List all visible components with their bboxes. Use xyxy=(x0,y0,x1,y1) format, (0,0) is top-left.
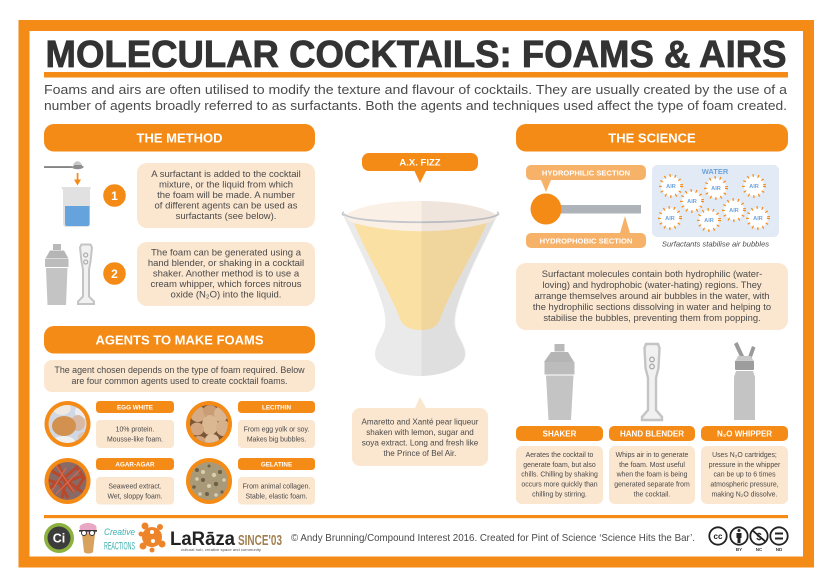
number badge 2: 2 xyxy=(111,267,118,281)
text box: agents intro xyxy=(44,360,315,392)
icon: creative commons licence: cc xyxy=(714,532,723,541)
logo: la raza: LaRāza xyxy=(170,529,235,550)
text box: egg white: 10% protein. xyxy=(116,426,154,434)
logo: creative reactions: Creative xyxy=(104,527,135,538)
panel: the method xyxy=(44,124,315,306)
text box: shaker: chilling by stirring. xyxy=(532,492,587,498)
text box: step 2: oxide (N₂O) into the liquid. xyxy=(171,290,281,300)
text box: shaker: chills. Chilling by shaking xyxy=(521,472,598,478)
text box: n2o whipper: pressure in the whipper xyxy=(709,462,781,469)
heading: the science: THE SCIENCE xyxy=(608,130,696,146)
text box: step 2: cream whipper, which forces nitrous xyxy=(150,279,302,290)
text box: cocktail description: the Prince of Bel Air. xyxy=(384,449,456,458)
intro text xyxy=(44,82,788,113)
photo: agar-agar xyxy=(44,458,91,504)
illustration: cocktail glass xyxy=(342,201,498,376)
icon: spoon, arrow and beaker xyxy=(44,161,91,227)
label: n2o whipper: N₂O WHIPPER xyxy=(717,430,772,438)
text box: hand blender: generated separate from xyxy=(614,482,690,488)
text box: agents intro: are four common agents used to create cocktail foams. xyxy=(71,376,288,386)
text box: n2o whipper: atmospheric pressure, xyxy=(710,482,779,488)
label: shaker xyxy=(516,426,603,441)
diagram: air bubbles in water: AIR xyxy=(753,216,763,222)
text box: n2o whipper xyxy=(701,446,788,504)
heading: agents xyxy=(44,326,315,354)
intro text: number of agents broadly referred to as surfactants. Both the agents and techniques used affect the type of foam created. xyxy=(44,98,787,113)
text box: n2o whipper: making N₂O dissolve. xyxy=(712,492,778,498)
text box: lecithin xyxy=(238,420,315,448)
label: egg white: EGG WHITE xyxy=(117,404,153,412)
text box: step 1: surfactants (see below). xyxy=(176,211,276,222)
label: n2o whipper xyxy=(701,426,788,441)
label: hydrophobic section: HYDROPHOBIC SECTION xyxy=(540,236,632,246)
text box: gelatine: From animal collagen. xyxy=(243,484,310,490)
text box: hand blender: Whips air in to generate xyxy=(616,452,689,459)
photo: gelatine xyxy=(186,458,232,504)
icon: shaker xyxy=(544,344,574,420)
text box: egg white: Mousse-like foam. xyxy=(107,436,163,444)
label: hand blender: HAND BLENDER xyxy=(620,430,684,438)
logo: orange splat xyxy=(138,522,166,552)
text box: hand blender xyxy=(609,446,695,504)
heading: agents: AGENTS TO MAKE FOAMS xyxy=(95,332,264,348)
diagram: air bubbles in water: AIR xyxy=(749,184,759,190)
text box: hand blender: when the foam is being xyxy=(616,472,688,478)
text box: step 1: mixture, or the liquid from which xyxy=(159,180,293,190)
logo: la raza: cultural hub, creative space and community xyxy=(181,548,262,552)
icon: creative commons licence: $ xyxy=(756,532,762,543)
text box: shaker: Aerates the cocktail to xyxy=(526,452,594,459)
number badge 1: 1 xyxy=(111,189,118,203)
text box: step 2 xyxy=(137,242,315,306)
text box: egg white xyxy=(96,420,174,448)
text box: surfactant explanation: loving) and hydrophobic (water-hating) regions. They xyxy=(542,279,762,290)
diagram: air bubbles in water xyxy=(652,165,779,237)
icon: hand blender xyxy=(642,344,662,420)
text box: step 1: of different agents can be used as xyxy=(155,200,298,212)
diagram: air bubbles in water: AIR xyxy=(687,199,697,205)
text box: cocktail description: shaken with lemon, sugar and xyxy=(366,428,474,437)
text box: surfactant explanation: stabilise the bubbles, preventing them from popping. xyxy=(543,312,761,323)
text box: agar-agar: Seaweed extract. xyxy=(108,484,162,490)
icon: n2o whipper xyxy=(734,342,756,420)
text box: agar-agar: Wet, sloppy foam. xyxy=(107,494,163,500)
title: MOLECULAR COCKTAILS: FOAMS & AIRS xyxy=(46,34,786,76)
label: gelatine: GELATINE xyxy=(261,462,292,468)
logo: compound interest: Ci xyxy=(53,532,65,546)
text: REACTIONS xyxy=(104,540,135,552)
text box: step 1: the foam will be made. A number xyxy=(157,190,295,201)
label: a.x. fizz xyxy=(362,153,478,183)
heading: the method xyxy=(44,124,315,152)
diagram: air bubbles in water: AIR xyxy=(666,184,676,190)
label: shaker: SHAKER xyxy=(543,430,577,438)
text box: step 2: shaker. Another method is to use a xyxy=(153,268,300,280)
label: agar-agar: AGAR-AGAR xyxy=(115,462,155,468)
title underline xyxy=(44,72,788,78)
logo: pint of science xyxy=(79,523,97,554)
text box: shaker: generate foam, but also xyxy=(523,462,596,469)
text box: cocktail description: soya extract. Long and fresh like xyxy=(362,438,479,448)
icon: hand blender small xyxy=(78,244,94,304)
panel: agents to make foams xyxy=(44,326,315,504)
logo: la raza xyxy=(170,529,282,552)
icon: shaker small xyxy=(45,244,68,305)
diagram: surfactant molecule xyxy=(526,165,646,248)
text box: step 1 xyxy=(137,163,315,228)
text box: surfactant explanation: arrange themselves around air bubbles in the water, with xyxy=(534,290,770,301)
intro text: Foams and airs are often utilised to modify the texture and flavour of cocktails. They are usually created by the use of a xyxy=(44,82,788,97)
diagram: air bubbles in water: AIR xyxy=(665,216,675,222)
icon: creative commons licence xyxy=(709,527,788,552)
text box: n2o whipper: Uses N₂O cartridges; xyxy=(712,452,777,459)
text box: hand blender: the cocktail. xyxy=(634,492,670,498)
icon: creative commons licence: BY xyxy=(736,547,742,552)
icon: creative commons licence: NC xyxy=(756,547,763,552)
logo: compound interest xyxy=(44,523,74,553)
text box: surfactant explanation xyxy=(516,263,788,330)
text box: agar-agar xyxy=(96,477,174,504)
text box: lecithin: Makes big bubbles. xyxy=(247,436,306,444)
text box: surfactant explanation: Surfactant molecules contain both hydrophilic (water- xyxy=(542,268,762,279)
label: lecithin xyxy=(238,401,315,413)
label: a.x. fizz: A.X. FIZZ xyxy=(399,158,441,168)
text box: step 1: A surfactant is added to the cocktail xyxy=(151,169,301,180)
panel: the science xyxy=(516,124,788,504)
text box: cocktail description xyxy=(352,397,488,466)
label: hydrophilic section: HYDROPHILIC SECTION xyxy=(542,168,630,178)
text box: lecithin: From egg yolk or soy. xyxy=(244,426,309,434)
text box: step 2: The foam can be generated using a xyxy=(151,248,302,258)
diagram: air bubbles in water: AIR xyxy=(704,218,714,224)
number badge 1 xyxy=(103,184,126,207)
text box: gelatine: Stable, elastic foam. xyxy=(245,494,308,500)
heading: the method: THE METHOD xyxy=(137,130,222,146)
number badge 2 xyxy=(103,262,126,285)
logo: creative reactions xyxy=(104,527,135,552)
diagram: air bubbles in water: WATER xyxy=(702,167,729,176)
label: gelatine xyxy=(238,458,315,470)
panel: cocktail xyxy=(342,153,498,466)
heading: the science xyxy=(516,124,788,152)
photo: lecithin xyxy=(186,401,232,447)
text box: cocktail description: Amaretto and Xanté pear liqueur xyxy=(362,418,479,426)
footer rule xyxy=(44,515,788,518)
diagram: air bubbles in water: AIR xyxy=(711,186,721,192)
text box: n2o whipper: can be up to 6 times xyxy=(713,472,776,478)
label: agar-agar xyxy=(96,458,174,470)
label: lecithin: LECITHIN xyxy=(262,404,291,412)
label: hand blender xyxy=(609,426,695,441)
text box: hand blender: the foam. Most useful xyxy=(619,462,685,469)
diagram: air bubbles in water: AIR xyxy=(729,208,739,214)
logo: la raza: SINCE'03 xyxy=(238,533,282,549)
text box: gelatine xyxy=(238,477,315,504)
icon: creative commons licence: ND xyxy=(776,547,783,552)
photo: egg white xyxy=(44,401,91,448)
caption: surfactants: Surfactants stabilise air bubbles xyxy=(662,240,769,248)
text box: surfactant explanation: the hydrophilic sections dissolving in water and helping to xyxy=(533,301,771,312)
text box: shaker xyxy=(516,446,603,504)
copyright text: © Andy Brunning/Compound Interest 2016. Created for Pint of Science ‘Science Hits the Bar’. xyxy=(291,533,695,544)
text box: step 2: hand blender, or shaking in a cocktail xyxy=(148,258,304,269)
text box: agents intro: The agent chosen depends on the type of foam required. Below xyxy=(54,365,305,375)
label: egg white xyxy=(96,401,174,413)
text box: shaker: occurs more quickly than xyxy=(521,482,598,488)
